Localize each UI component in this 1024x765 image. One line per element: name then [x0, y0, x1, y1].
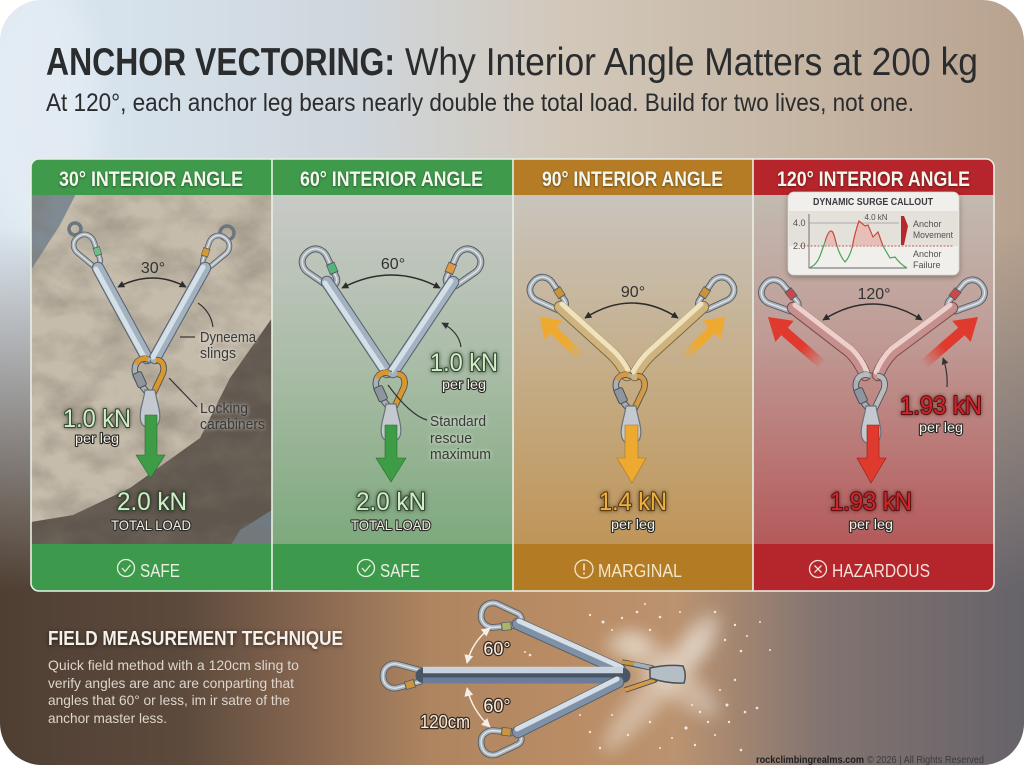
angle label: 60: 60°	[381, 256, 405, 273]
sling triangle diagram	[383, 601, 685, 757]
angle label: 90: 90°	[621, 284, 645, 301]
chart legend: Anchor	[913, 249, 942, 259]
callout: Standard rescue maximum: rescue	[430, 430, 472, 447]
callout: dynamic surge chart	[788, 192, 959, 275]
surge line chart: 4.0	[793, 218, 806, 228]
surge line chart: 4.0 kN	[864, 213, 888, 222]
surge line chart	[789, 211, 958, 268]
value: per leg 1.93 kN with leader: per leg	[919, 419, 963, 435]
callout: Locking carabiners: carabiners	[200, 416, 265, 433]
label: top 60 degrees: 60°	[483, 639, 511, 659]
arrow: right anchor force	[914, 306, 987, 376]
value: total load 2.0 kN	[351, 488, 431, 533]
angle label: 60	[342, 256, 440, 288]
header: 30 degree: 30° INTERIOR ANGLE	[59, 168, 243, 191]
panel frame and dividers	[31, 159, 994, 591]
text block: field method description: angles that 60° or less, im ir satre of the	[48, 692, 290, 708]
callout: Standard rescue maximum: maximum	[430, 446, 491, 463]
status: marginal	[513, 544, 753, 591]
arrow: left anchor force	[759, 306, 832, 376]
header: 90 degree	[513, 159, 753, 195]
callout: Dyneema slings: slings	[200, 345, 236, 362]
value: 1.4 kN per leg: 1.4 kN	[599, 488, 667, 516]
value: per leg 1.0 kN with leader: per leg	[442, 376, 486, 392]
title: Why Interior Angle Matters at 200 kg	[405, 41, 978, 84]
sling diagram: 30 degree	[69, 223, 234, 428]
sling: top leg	[518, 621, 621, 670]
chart legend: Anchor	[913, 219, 942, 229]
value: per leg 1.0 kN: per leg	[75, 430, 119, 446]
angle arrow: bottom 60	[467, 688, 490, 727]
callout: Locking carabiners	[169, 378, 265, 433]
value: 1.93 kN per leg: per leg	[849, 516, 893, 532]
callout card	[788, 192, 959, 275]
header: 120 degree: 120° INTERIOR ANGLE	[777, 168, 970, 191]
text block: field method description: verify angles are anc are conparting that	[48, 675, 294, 691]
angle arrow: top 60	[467, 628, 490, 663]
heading: field measurement technique: FIELD MEASUREMENT TECHNIQUE	[48, 628, 343, 650]
value: total load 2.0 kN	[111, 488, 191, 533]
title: ANCHOR VECTORING:	[46, 41, 395, 84]
value: per leg 1.93 kN with leader: 1.93 kN	[900, 392, 982, 420]
callout: Standard rescue maximum	[388, 385, 491, 463]
header: 60 degree	[272, 159, 513, 195]
value: total load 2.0 kN: 2.0 kN	[117, 488, 187, 516]
sling: middle leg	[423, 670, 623, 680]
status: hazardous: HAZARDOUS	[832, 561, 930, 581]
header: 120 degree	[753, 159, 994, 195]
panel: 30 degree interior angle	[31, 159, 272, 591]
surge line chart: 2.0	[793, 241, 806, 251]
arrow: 60 degree load	[376, 425, 406, 482]
master point carabiners	[622, 662, 685, 690]
arrow: 120 degree load	[857, 425, 886, 483]
footer credit	[756, 755, 984, 765]
callout: Dyneema slings: Dyneema	[200, 329, 257, 346]
text block: field method description: Quick field method with a 120cm sling to	[48, 657, 299, 673]
panel background	[753, 195, 994, 544]
status: safe	[272, 544, 513, 591]
panel: 90 degree interior angle	[513, 159, 753, 591]
value: per leg 1.0 kN with leader: 1.0 kN	[430, 349, 498, 377]
chalk dust cloud	[524, 603, 771, 761]
chart legend: Movement	[913, 230, 953, 240]
header: 60 degree: 60° INTERIOR ANGLE	[300, 168, 483, 191]
sling diagram: 90 degree	[525, 273, 739, 444]
header: 30 degree	[31, 159, 272, 195]
header: 90 degree: 90° INTERIOR ANGLE	[542, 168, 723, 191]
value: 1.93 kN per leg	[830, 488, 912, 532]
arrow: 30 degree load	[136, 415, 165, 478]
value: 1.4 kN per leg: per leg	[611, 516, 655, 532]
carabiner: bottom	[479, 726, 523, 757]
value: per leg 1.0 kN with leader	[430, 323, 498, 392]
value: total load 2.0 kN: TOTAL LOAD	[351, 517, 431, 533]
sling diagram: 120 degree	[757, 275, 989, 444]
value: per leg 1.0 kN: 1.0 kN	[63, 405, 131, 433]
angle label: 120	[823, 286, 922, 320]
status: safe: SAFE	[380, 561, 420, 581]
subtitle: At 120°, each anchor leg bears nearly double the total load. Build for two lives, not one.	[46, 89, 914, 117]
panel: 60 degree interior angle	[272, 159, 513, 591]
value: per leg 1.0 kN	[63, 405, 131, 446]
value: total load 2.0 kN: 2.0 kN	[356, 488, 426, 516]
value: 1.93 kN per leg: 1.93 kN	[830, 488, 912, 516]
panel: 120 degree interior angle	[753, 159, 994, 591]
sling diagram: 60 degree	[297, 244, 486, 442]
angle label: 120: 120°	[857, 286, 891, 303]
callout: Dyneema slings	[180, 303, 257, 362]
arrow: right anchor force	[674, 307, 734, 367]
arrow: 90 degree load	[617, 425, 646, 483]
status: hazardous	[753, 544, 994, 591]
angle label: 30: 30°	[141, 260, 165, 277]
value: total load 2.0 kN: TOTAL LOAD	[111, 517, 191, 533]
text block: field method description	[48, 657, 299, 726]
panel background	[272, 195, 513, 544]
angle label: 90	[585, 284, 678, 318]
label: bottom 60 degrees: 60°	[483, 696, 511, 716]
rock photo background	[31, 190, 272, 550]
sling: bottom leg	[517, 679, 618, 732]
value: 1.4 kN per leg	[599, 488, 667, 532]
value: per leg 1.93 kN with leader	[900, 358, 982, 435]
label: 120cm: 120cm	[420, 712, 470, 732]
carabiner: middle	[383, 664, 424, 688]
callout: Locking carabiners: Locking	[200, 400, 248, 417]
chart legend: Failure	[913, 260, 941, 270]
text block: field method description: anchor master less.	[48, 710, 167, 726]
panel background	[513, 195, 753, 544]
status: marginal: MARGINAL	[598, 561, 682, 581]
status: safe	[31, 544, 272, 591]
angle label: 30	[118, 260, 186, 287]
title	[46, 41, 978, 84]
arrow: left anchor force	[531, 307, 591, 367]
callout title: DYNAMIC SURGE CALLOUT	[813, 197, 933, 208]
callout: Standard rescue maximum: Standard	[430, 413, 486, 430]
carabiner: top	[479, 601, 523, 632]
chart legend	[913, 219, 953, 270]
status: safe: SAFE	[140, 561, 180, 581]
